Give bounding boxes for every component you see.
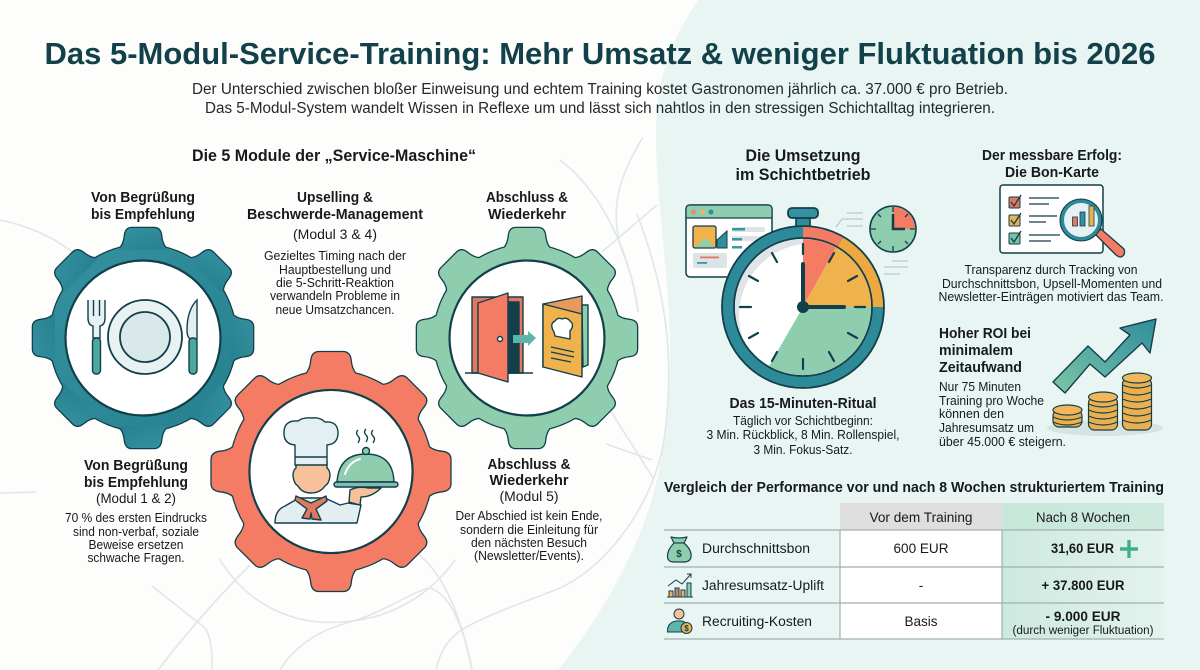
heading: Umsetzung: Die Umsetzung — [746, 147, 860, 165]
gear title and text: Upselling: die 5-Schritt-Reaktion — [276, 276, 394, 290]
table row: Recruiting: - 9.000 EUR — [1046, 609, 1121, 624]
table row: Recruiting: Basis — [904, 614, 938, 629]
heading: Umsetzung — [736, 147, 870, 184]
text: ROI: können den — [939, 407, 1004, 421]
table heading: Vergleich der Performance vor und nach 8 Wochen strukturiertem Training — [664, 480, 1164, 496]
table row: Recruiting — [667, 609, 1154, 637]
table row: Recruiting: (durch weniger Fluktuation) — [1012, 625, 1154, 637]
icon: money bag — [667, 537, 691, 562]
text: Modul 5: (Modul 5) — [500, 489, 558, 504]
text: 15-Minuten-Ritual: Das 15-Minuten-Ritual — [730, 396, 876, 412]
gear title and text: Upselling: (Modul 3 & 4) — [293, 227, 377, 242]
table row: Durchschnittsbon — [667, 537, 1138, 562]
text: 15-Minuten-Ritual: 3 Min. Rückblick, 8 Min. Rollenspiel, — [706, 428, 900, 442]
panel: Umsetzung im Schichtbetrieb — [686, 147, 916, 457]
icon: menu card — [543, 296, 588, 377]
text: Transparenz: Transparenz durch Tracking von — [964, 263, 1138, 277]
intro text — [192, 81, 1008, 117]
icon: chef — [275, 418, 398, 523]
text: 15-Minuten-Ritual: 3 Min. Fokus-Satz. — [754, 443, 852, 457]
icon: knife — [187, 300, 197, 374]
panel: die 5 Module — [33, 147, 637, 591]
table header labels: Nach 8 Wochen — [1036, 510, 1130, 525]
gear title: Begrüßung: bis Empfehlung — [91, 207, 195, 223]
icon: person with coin: $ — [684, 624, 689, 633]
heading: Bon-Karte — [982, 148, 1122, 181]
intro text: Der Unterschied zwischen bloßer Einweisung und echtem Training kostet Gastronomen jährlich ca. 37.000 € pro Betrieb. — [192, 81, 1008, 98]
gear title and text: Upselling: Gezieltes Timing nach der — [264, 249, 406, 263]
heading: Bon-Karte: Der messbare Erfolg: — [982, 148, 1122, 164]
text: Modul 1 und 2 — [65, 458, 207, 565]
heading: 5 Module: Die 5 Module der „Service-Maschine“ — [192, 147, 476, 165]
text: Transparenz — [938, 263, 1164, 304]
gear title: Abschluss — [486, 190, 568, 223]
text: Modul 5 — [456, 457, 602, 563]
text: Modul 5: Wiederkehr — [490, 473, 569, 489]
icon: fork — [88, 300, 105, 374]
heading: Umsetzung: im Schichtbetrieb — [736, 166, 870, 184]
icon: growth arrow — [1053, 319, 1156, 393]
heading: Hoher ROI: Hoher ROI bei — [939, 326, 1031, 342]
text: ROI: Nur 75 Minuten — [939, 380, 1021, 394]
text: Modul 5: den nächsten Besuch — [471, 536, 587, 550]
gear title and text: Upselling — [247, 190, 423, 317]
text: Modul 5: sondern die Einleitung für — [460, 523, 598, 537]
gear title and text: Upselling: Hauptbestellung und — [279, 263, 391, 277]
title: Das 5-Modul-Service-Training: Mehr Umsatz & weniger Fluktuation bis 2026 — [44, 36, 1156, 71]
icon: speed lines — [836, 213, 908, 274]
heading: Hoher ROI: Zeitaufwand — [939, 360, 1022, 376]
gear title: Abschluss: Abschluss & — [486, 190, 568, 206]
table row: Durchschnittsbon: 600 EUR — [894, 541, 949, 556]
text: ROI: Jahresumsatz um — [939, 421, 1034, 435]
icon: browser window — [686, 205, 772, 277]
icon: open door — [465, 293, 536, 382]
text: Modul 1 und 2: bis Empfehlung — [84, 475, 188, 491]
heading: Bon-Karte: Die Bon-Karte — [1005, 165, 1099, 181]
table header labels: Vor dem Training — [870, 510, 972, 525]
gear title and text: Upselling: Beschwerde-Management — [247, 207, 423, 223]
icon: plus — [1120, 540, 1138, 558]
text: Transparenz: Newsletter-Einträgen motiviert das Team. — [938, 290, 1164, 304]
heading: Hoher ROI — [939, 326, 1031, 376]
table row: Jahresumsatz: - — [919, 578, 923, 593]
text: Modul 1 und 2: sind non-verbaf, soziale — [73, 525, 199, 539]
text: Modul 5: Der Abschied ist kein Ende, — [456, 509, 602, 523]
gear title and text: Upselling: verwandeln Probleme in — [270, 289, 400, 303]
text: ROI: Training pro Woche — [939, 394, 1044, 408]
text: Modul 1 und 2: Beweise ersetzen — [88, 538, 184, 552]
table cells — [664, 503, 1164, 639]
text: ROI — [939, 380, 1066, 449]
table row: Jahresumsatz: Jahresumsatz-Uplift — [702, 578, 824, 593]
text: Modul 1 und 2: 70 % des ersten Eindrucks — [65, 511, 207, 525]
icon: person with coin — [667, 609, 692, 634]
icon: stopwatch — [722, 208, 884, 388]
table row: Jahresumsatz — [667, 574, 1125, 597]
gear title and text: Upselling: neue Umsatzchancen. — [276, 303, 394, 317]
text: Modul 1 und 2: (Modul 1 & 2) — [96, 491, 176, 506]
table row: Durchschnittsbon: 31,60 EUR — [1051, 541, 1114, 556]
text: 15-Minuten-Ritual: Täglich vor Schichtbeginn: — [733, 414, 873, 428]
gear: green with door and menu — [417, 228, 637, 448]
text: Modul 5: (Newsletter/Events). — [474, 549, 584, 563]
text: ROI: über 45.000 € steigern. — [939, 435, 1066, 449]
panel: messbarer Erfolg — [938, 148, 1164, 449]
table row: Durchschnittsbon: Durchschnittsbon — [702, 541, 810, 556]
table row: Recruiting: Recruiting-Kosten — [702, 614, 812, 629]
text: Modul 1 und 2: Von Begrüßung — [84, 458, 188, 474]
text: Modul 5: Abschluss & — [488, 457, 571, 473]
gear title and text: Upselling: Upselling & — [297, 190, 373, 206]
panel: Vergleichstabelle — [664, 480, 1164, 639]
gear: teal with plate — [33, 228, 253, 448]
icon: coin stacks — [1047, 373, 1163, 436]
text: Modul 1 und 2: schwache Fragen. — [88, 551, 184, 565]
heading: Hoher ROI: minimalem — [939, 343, 1013, 359]
table row: Jahresumsatz: + 37.800 EUR — [1042, 578, 1125, 593]
icon: small clock — [870, 206, 916, 252]
gear title: Abschluss: Wiederkehr — [488, 207, 566, 223]
gear title: Begrüßung: Von Begrüßung — [91, 190, 195, 206]
icon: plate — [108, 300, 182, 374]
intro text: Das 5-Modul-System wandelt Wissen in Reflexe um und lässt sich nahtlos in den stressigen Schichtalltag integrieren. — [205, 100, 995, 117]
icon: bon card with magnifier — [1000, 185, 1125, 257]
table header labels — [870, 510, 1130, 525]
text: 15-Minuten-Ritual — [706, 396, 900, 457]
gear: coral with chef — [212, 352, 450, 591]
icon: bar chart with arrow — [667, 574, 693, 597]
text: Transparenz: Durchschnittsbon, Upsell-Momenten und — [942, 277, 1162, 291]
icon: money bag: $ — [676, 549, 682, 560]
gear title: Begrüßung — [91, 190, 195, 223]
